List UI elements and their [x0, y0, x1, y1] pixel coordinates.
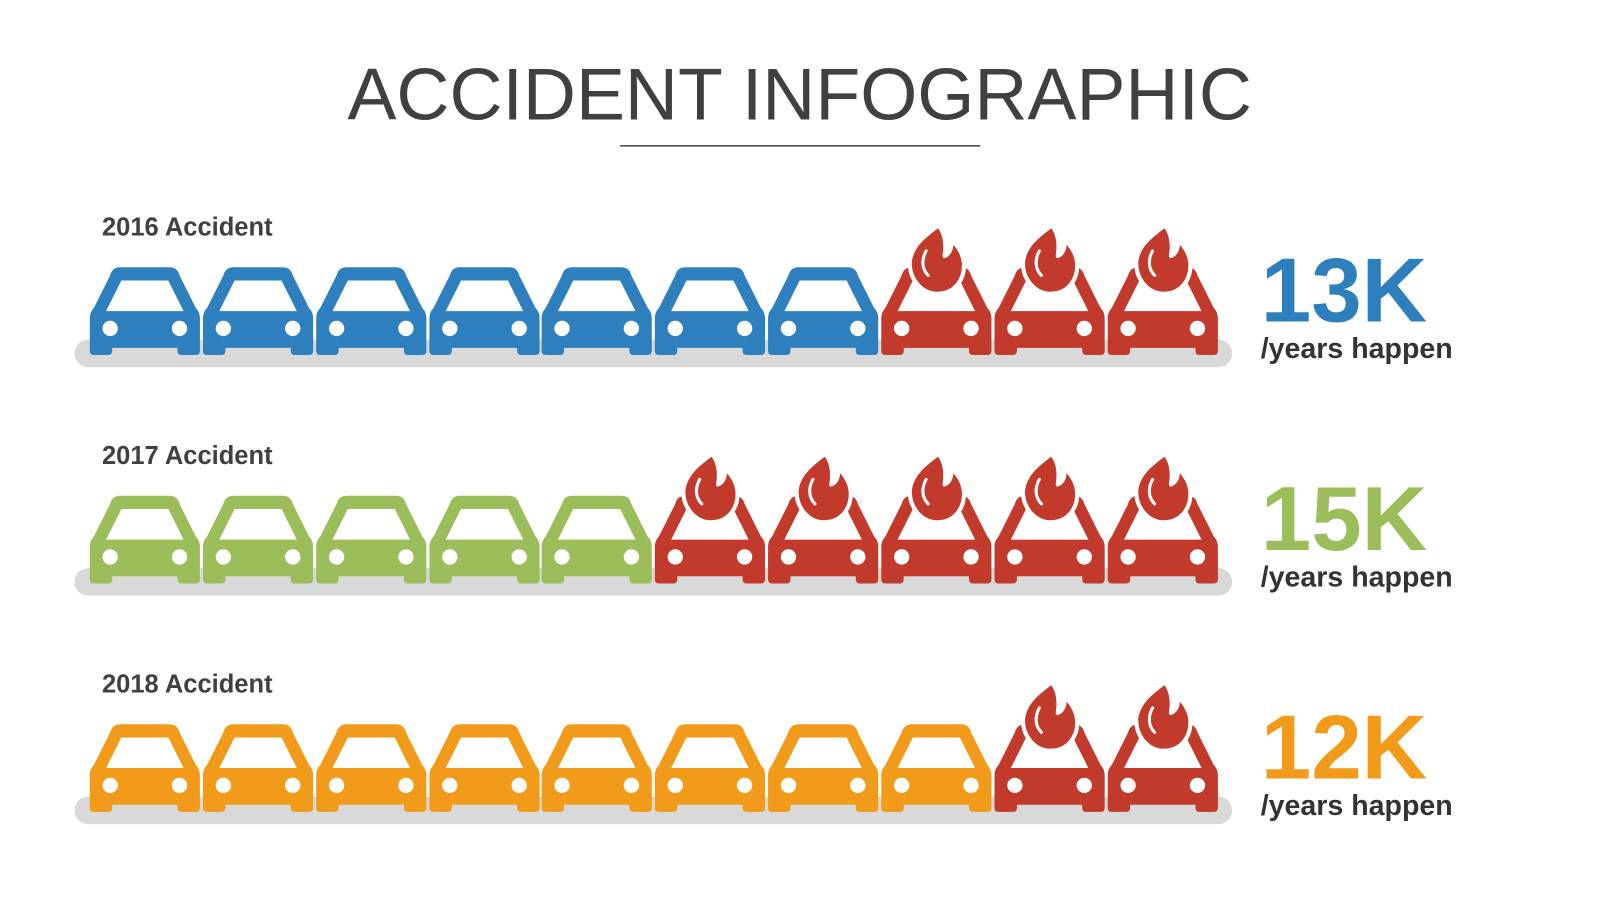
title: ACCIDENT INFOGRAPHIC	[347, 53, 1252, 135]
stat 2017: 15K	[1261, 469, 1427, 570]
row: 2017: /years happen	[1261, 561, 1453, 593]
row: 2018	[74, 671, 1453, 824]
row: 2016: /years happen	[1261, 333, 1453, 365]
cars 2017	[90, 454, 1218, 583]
label: 2016: 2016 Accident	[102, 214, 273, 242]
row: 2017	[74, 442, 1453, 596]
label: 2018: 2018 Accident	[102, 671, 273, 699]
row: 2016	[74, 214, 1453, 367]
label: 2017: 2017 Accident	[102, 442, 273, 470]
stat 2018: 12K	[1261, 697, 1427, 798]
cars 2016	[90, 225, 1218, 355]
cars 2018	[90, 682, 1218, 812]
stat 2016: 13K	[1261, 240, 1427, 341]
row: 2018: /years happen	[1261, 790, 1453, 822]
